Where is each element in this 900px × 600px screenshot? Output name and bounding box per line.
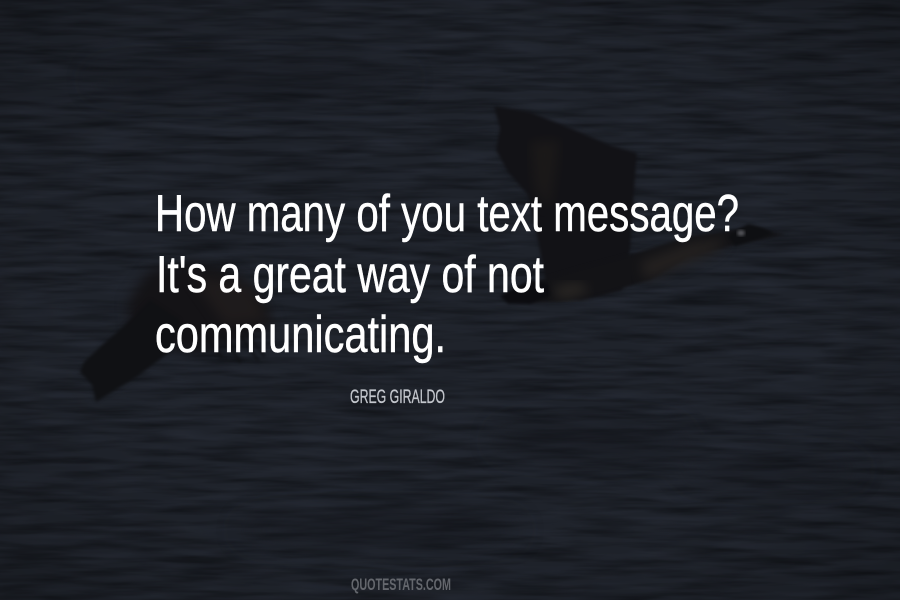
left goose body [128, 262, 275, 352]
quote line 1: How many of you text message? [155, 185, 739, 243]
goose body [505, 226, 786, 303]
left goose wing [80, 300, 180, 402]
goose cheek [737, 230, 745, 236]
quote text [155, 185, 739, 364]
goose wing [494, 106, 637, 300]
left goose feathers [205, 330, 264, 362]
goose brown neck and flank [640, 238, 728, 280]
quote line 2: It's a great way of not [156, 246, 544, 304]
author name: GREG GIRALDO [350, 387, 445, 408]
dark wave patches [90, 66, 860, 544]
goose: left, blurred [80, 262, 275, 402]
goose: right, in flight [494, 106, 786, 304]
quote line 3: communicating. [155, 306, 446, 364]
goose head [728, 224, 774, 246]
goose feet patch [500, 280, 552, 304]
source watermark: QUOTESTATS.COM [351, 575, 451, 594]
